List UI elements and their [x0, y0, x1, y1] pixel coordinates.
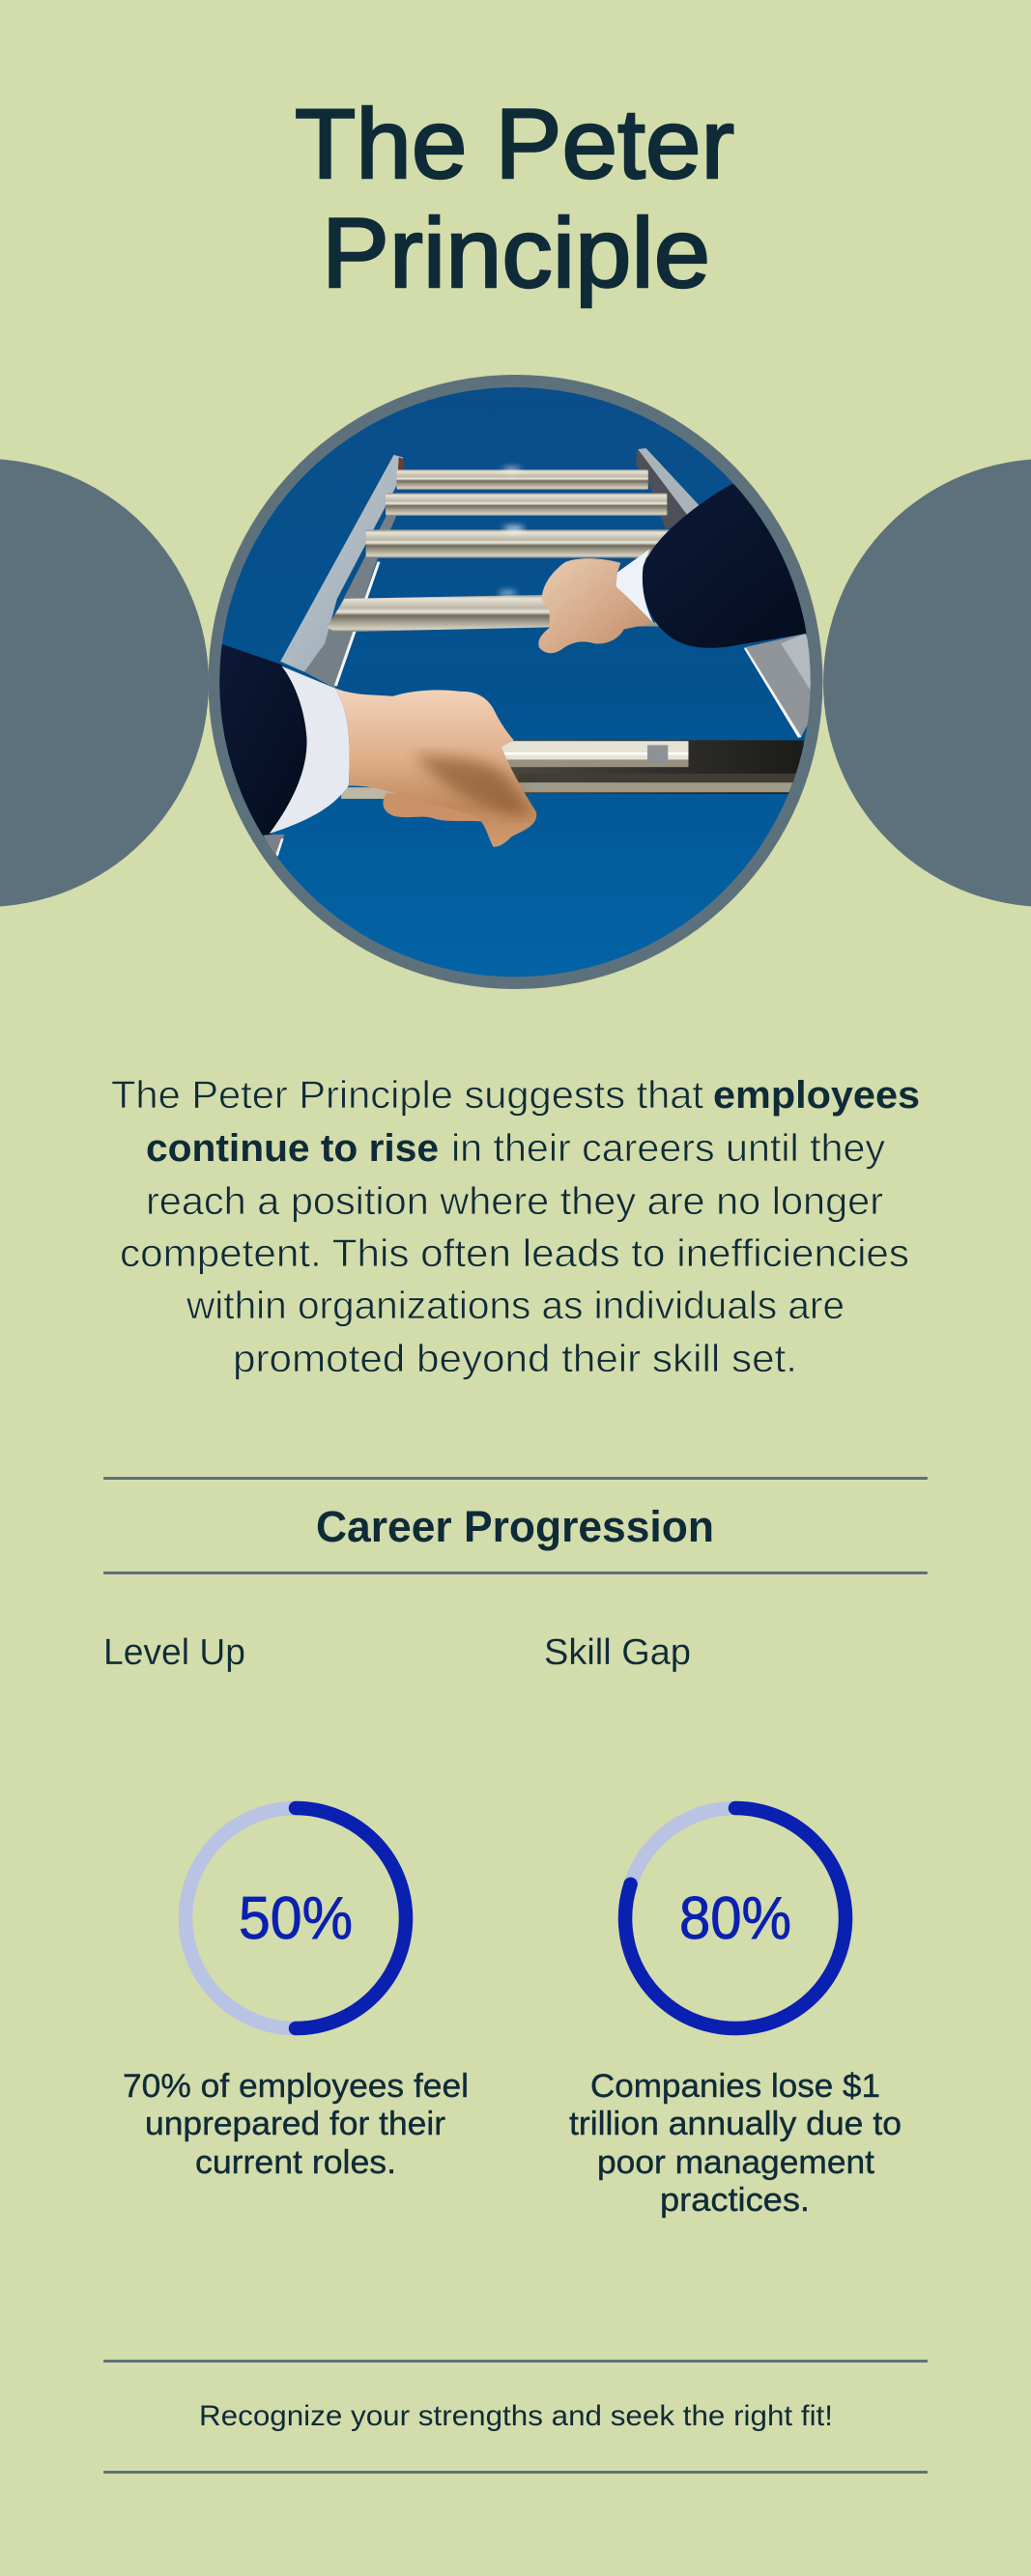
intro paragraph: continue to rise: [146, 1127, 439, 1170]
ladder photo: [219, 387, 811, 977]
caption: level up statistic: current roles.: [195, 2144, 396, 2181]
intro paragraph: in their careers until they: [451, 1127, 885, 1170]
caption: level up statistic: 70% of employees feel: [123, 2068, 469, 2105]
caption: level up statistic: unprepared for their: [145, 2106, 445, 2142]
rung 2: [386, 493, 667, 516]
left ladder rail: [263, 455, 404, 857]
title: The Peter: [295, 89, 734, 199]
hand shadow: [415, 753, 530, 816]
donut chart: 50%: [186, 1808, 406, 2028]
section heading: career progression: Career Progression: [316, 1502, 714, 1551]
closing message: Recognize your strengths and seek the right fit!: [199, 2400, 833, 2432]
intro paragraph: reach a position where they are no longer: [146, 1180, 883, 1223]
rung 1: [397, 469, 648, 490]
lower left sleeve: [219, 644, 307, 835]
caption: skill gap statistic: practices.: [660, 2182, 810, 2219]
title: [295, 89, 734, 308]
lower hand fingers: [383, 793, 481, 821]
intro paragraph: promoted beyond their skill set.: [233, 1338, 797, 1380]
right ladder rail: [636, 448, 812, 738]
intro paragraph: employees: [713, 1074, 920, 1117]
upper hand: [538, 558, 653, 653]
sky: [219, 387, 811, 977]
donut chart: 80%: 80%: [679, 1885, 791, 1952]
donut chart: 80%: [625, 1808, 845, 2028]
intro paragraph: competent. This often leads to inefficiencies: [120, 1232, 909, 1275]
upper right sleeve: [642, 484, 806, 648]
title: Principle: [322, 198, 710, 308]
intro paragraph: [111, 1074, 920, 1380]
label: skill gap: Skill Gap: [544, 1632, 691, 1673]
rung 4: [327, 595, 552, 632]
decorative circle right: [823, 459, 1031, 907]
caption: skill gap statistic: poor management: [597, 2144, 875, 2181]
photo: hands climbing a ladder in a circular frame: [193, 367, 838, 1005]
intro paragraph: The Peter Principle suggests that: [111, 1074, 703, 1117]
decorative circle left: [0, 459, 209, 907]
caption: skill gap statistic: Companies lose $1: [590, 2068, 880, 2105]
lower cuff: [270, 666, 350, 834]
intro paragraph: within organizations as individuals are: [186, 1285, 845, 1327]
big rung: [341, 740, 804, 799]
lower hand: [335, 689, 536, 847]
upper cuff: [616, 550, 653, 623]
donut chart: 50%: 50%: [239, 1885, 353, 1952]
rung 4 stub: [638, 622, 659, 627]
label: level up: Level Up: [103, 1632, 245, 1673]
caption: level up statistic: [123, 2068, 469, 2181]
caption: skill gap statistic: [569, 2068, 902, 2219]
caption: skill gap statistic: trillion annually due to: [569, 2106, 902, 2142]
photo frame ring: [209, 375, 823, 989]
rung 3: [366, 529, 678, 558]
sun glints on rungs: [499, 467, 525, 595]
